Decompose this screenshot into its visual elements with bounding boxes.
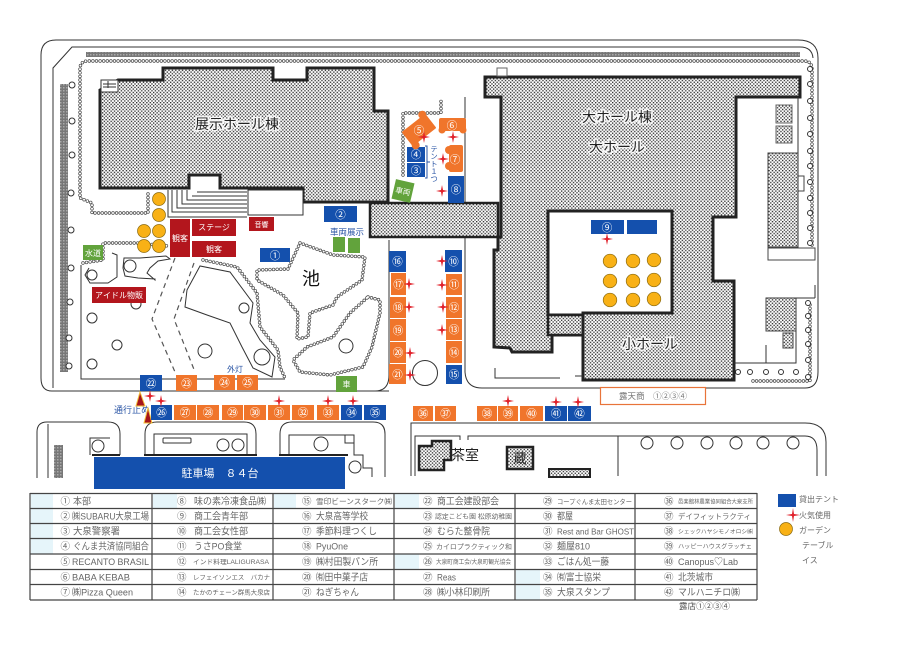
stage area: audience front: 観客 (206, 244, 222, 254)
tent 10: ⑩ (448, 256, 459, 268)
hatched strip: left (60, 84, 68, 372)
table column 5: ㉚ (543, 512, 553, 522)
stage area: audience left: 観客 (172, 233, 188, 243)
table column 4: ㉗ (423, 572, 433, 584)
table column 4 (423, 496, 512, 598)
tent 22 (140, 375, 162, 391)
table column 3: 季節料理つくし (316, 526, 377, 538)
legend: garden: ガーデン (799, 525, 831, 535)
table column 3 (302, 496, 393, 598)
hatched strip: top (86, 52, 800, 57)
table column 5: 都屋 (557, 512, 573, 522)
tea house block: 蔵 (513, 451, 527, 466)
table column 1: ② (60, 512, 70, 522)
garden tables by stage (138, 192, 166, 252)
table column 6: ㊳ (664, 526, 674, 538)
tea house block: 茶室 (451, 447, 479, 463)
legend: rental tent: 貸出テント (799, 494, 839, 504)
tent 40 (520, 406, 543, 421)
vehicle space bottom: 車 (342, 379, 350, 389)
table column 6: デイフィットラクティ (678, 511, 751, 521)
tent 3 (407, 163, 425, 177)
table column 5: ㉙ (543, 496, 553, 508)
table column 6: ㊵ (664, 557, 674, 568)
tent 12 (446, 297, 462, 318)
tent 13 (446, 319, 462, 340)
tent 23: ㉓ (181, 378, 192, 390)
table column 5: ㈲富士協栄 (557, 572, 601, 584)
table column 6: 北茨城市 (678, 572, 713, 584)
tent 34: ㉞ (346, 407, 357, 419)
water supply (83, 245, 103, 260)
annex buildings right (495, 68, 815, 378)
tent 23 (176, 375, 197, 391)
tent 39 (498, 406, 518, 421)
tent 2: ② (335, 209, 346, 221)
tent 40: ㊵ (526, 408, 537, 420)
tent 7 garden table (445, 145, 463, 172)
tent 18: ⑱ (393, 302, 404, 314)
table column 3: ⑲ (302, 557, 312, 568)
open-air stalls box (600, 388, 706, 404)
table column 2: ⑨ (177, 512, 187, 522)
table column 2: 味の素冷凍食品㈱ (194, 496, 266, 508)
island (293, 297, 380, 375)
table column 5: ごはん処一藤 (557, 556, 609, 568)
corridor (370, 203, 498, 237)
stalls note under table: 露店①②③④ (679, 601, 731, 611)
table column 1: ぐんま共済協同組合 (73, 540, 149, 552)
table column 5: Rest and Bar GHOST (557, 526, 634, 536)
tent 28: ㉘ (203, 407, 214, 419)
garden (81, 253, 285, 379)
table column 2 (177, 496, 270, 598)
lower block middle (144, 422, 257, 455)
table column 6: ㊲ (664, 512, 674, 522)
vehicle space forecourt: 車両 (395, 184, 412, 198)
table column 1: BABA KEBAB (72, 572, 130, 584)
exhibition hall building (100, 68, 388, 202)
exhibitor table (30, 493, 757, 600)
tent 42: ㊷ (574, 408, 585, 420)
tent 31: ㉛ (274, 407, 285, 419)
tent 12: ⑫ (449, 302, 460, 314)
tent 15 (446, 365, 462, 384)
tent 34 (341, 405, 362, 420)
table column 6: Canopus♡Lab (678, 557, 738, 568)
parking area (94, 457, 345, 489)
tent 29 (222, 405, 243, 420)
tent 4: ④ (411, 149, 422, 161)
table column 3: PyuOne (316, 542, 348, 552)
extra blue tent (627, 220, 657, 234)
tent 9 (591, 220, 624, 234)
tent 27: ㉗ (180, 407, 191, 419)
table column 6: ㊷ (664, 588, 674, 598)
tent 27 (174, 405, 196, 420)
table column 2: ⑪ (177, 542, 187, 552)
tent 33 (317, 405, 339, 420)
table column 1: ④ (60, 542, 70, 552)
table column 2: ⑧ (177, 496, 187, 508)
table column 5: 麺屋810 (557, 540, 590, 552)
table column 5: コープぐんま太田センター (557, 497, 632, 506)
tent 1: ① (270, 250, 281, 262)
vehicle space bottom (336, 376, 357, 392)
pond (257, 243, 365, 339)
tent 41: ㊶ (551, 408, 562, 420)
tent 22: ㉒ (146, 378, 157, 390)
tent 19 (390, 319, 406, 341)
stage (192, 219, 236, 236)
left path lamps (66, 82, 75, 369)
tent 28 (197, 405, 219, 420)
table column 2: ⑬ (177, 572, 187, 584)
table column 6 (664, 496, 753, 598)
road closed label: 通行止め (114, 404, 150, 415)
right path lamps (736, 66, 812, 380)
vehicle display label: 車両展示 (330, 227, 364, 237)
table column 5: 大泉スタンプ (557, 586, 610, 598)
tea house block (411, 423, 826, 477)
table column 4: 商工会建設部会 (437, 496, 499, 508)
table column 4: むらた整骨院 (437, 526, 490, 538)
table cell tints (31, 494, 540, 600)
table column 2: ⑫ (177, 557, 187, 568)
tent 29: ㉙ (227, 407, 238, 419)
table column 3: ⑱ (302, 542, 312, 552)
tent 37 (435, 406, 456, 421)
table column 3: ⑰ (302, 526, 312, 538)
sound booth (249, 217, 274, 231)
tent 38: ㊳ (482, 408, 493, 420)
garden tables in courtyard (603, 253, 661, 307)
table column 6: シェックハヤシモノオロシ㈱ (678, 528, 753, 536)
stage area: audience left (170, 219, 190, 257)
stage: ステージ (198, 223, 230, 232)
site outer boundary (41, 40, 818, 391)
table column 4: 認定こども園 松原幼稚園 (435, 512, 512, 520)
lower block right (279, 422, 385, 477)
tent 30 (244, 405, 266, 420)
tent 4 (407, 147, 425, 162)
tent 26: ㉖ (156, 407, 167, 419)
tent 30: ㉚ (250, 407, 261, 419)
table column 2: 商工会青年部 (194, 510, 248, 522)
table column 2: インド料理LALIGURASA (193, 557, 270, 566)
idol goods stall: アイドル物販 (95, 290, 143, 300)
table column 3: ⑯ (302, 512, 312, 522)
exhibition hall building: 展示ホール棟 (195, 116, 279, 132)
open-air stalls box: 露天商 ①②③④ (619, 391, 687, 401)
tent 37: ㊲ (440, 408, 451, 420)
table column 1: ㈱Pizza Queen (72, 586, 133, 598)
tent 10 (445, 250, 462, 272)
tent 20 (390, 342, 406, 363)
road closed cone lower (144, 408, 152, 423)
table column 1: ⑦ (60, 588, 70, 598)
bead walls (80, 61, 812, 381)
tent 3: ③ (411, 165, 422, 177)
tent 21: ㉑ (392, 369, 403, 381)
tent 14: ⑭ (449, 347, 460, 359)
table grid (30, 493, 757, 600)
table column 1: 大泉警察署 (73, 526, 120, 538)
legend: fire use: 火気使用 (799, 510, 831, 520)
table column 3: 雪印ビーンスターク㈱ (316, 496, 393, 506)
tent 16 (389, 251, 406, 272)
tent 26 (151, 405, 172, 420)
tent 25: ㉕ (242, 377, 253, 389)
tent 35: ㉟ (370, 407, 381, 419)
table column 5: ㉟ (543, 588, 553, 598)
tent 8: ⑧ (451, 184, 462, 196)
table column 1 (60, 496, 149, 598)
table column 6: 邑楽館林農業協同組合大泉支所 (678, 498, 753, 506)
vehicle space forecourt (391, 179, 415, 203)
tent 17 (391, 273, 406, 295)
table column 4: ㉘ (423, 588, 433, 598)
tent 33: ㉝ (323, 407, 334, 419)
table column 4: ㉒ (423, 496, 433, 508)
fire use markers (144, 131, 613, 408)
table column 1: ⑥ (60, 572, 70, 584)
tent 5 garden table (398, 109, 440, 151)
site inner boundary (53, 47, 813, 388)
tent 24 (214, 375, 235, 390)
tent 11 (446, 274, 462, 295)
tent 36 (413, 406, 433, 421)
stage area: audience front (192, 241, 236, 257)
tent 38 (477, 406, 497, 421)
table column 4: ㉓ (423, 512, 433, 522)
tent 19: ⑲ (393, 325, 404, 337)
table column 2: レフェイソンエス バカナ (193, 574, 270, 582)
table column 3: ねぎちゃん (316, 586, 359, 598)
tent 18 (390, 297, 406, 318)
table column 2: うさPO食堂 (194, 540, 242, 552)
tent 2 (324, 206, 357, 222)
tent 20: ⑳ (393, 347, 404, 359)
tent 13: ⑬ (449, 324, 460, 336)
table column 1: 本部 (73, 496, 91, 508)
tent 32: ㉜ (298, 407, 309, 419)
tent 41 (545, 406, 567, 421)
table column 5: ㉜ (543, 542, 553, 552)
tent 5 garden table: ⑤ (414, 125, 425, 137)
table column 4: カイロプラクティック和 (436, 542, 512, 551)
table column 1: ⑤ (60, 557, 70, 568)
table column 4: ㈱小林印刷所 (437, 586, 490, 598)
tent bracket note: テント１つ (430, 145, 438, 182)
table column 1: ③ (60, 526, 70, 538)
legend: chair: イス (802, 556, 818, 565)
table column 3: ㉑ (302, 588, 312, 598)
table column 4: 大泉町商工会/大泉町観光協会 (436, 558, 511, 566)
table column 6: ㊴ (664, 542, 674, 552)
table column 5: ㉞ (543, 572, 553, 584)
street lamp label: 外灯 (227, 364, 243, 374)
large hall building: 大ホール棟 (582, 109, 652, 125)
tent 36: ㊱ (418, 408, 429, 420)
table column 4: ㉕ (423, 542, 433, 552)
round bed (412, 360, 438, 386)
tent 6 garden table: ⑥ (447, 120, 458, 132)
entrance steps (168, 190, 303, 217)
tent 9: ⑨ (602, 222, 613, 234)
legend: table: テーブル (802, 540, 834, 550)
table column 3: ㈱村田製パン所 (316, 556, 378, 568)
table column 3: 大泉高等学校 (316, 510, 368, 522)
table column 4: ㉖ (423, 557, 433, 568)
tent 35 (364, 405, 386, 420)
site plan base (41, 40, 818, 391)
legend (778, 494, 839, 565)
tent 7 garden table: ⑦ (450, 154, 461, 166)
tent 16: ⑯ (392, 256, 403, 268)
table column 3: ㈲田中菓子店 (316, 572, 368, 584)
vehicle display spaces (333, 237, 360, 253)
table column 2: ⑭ (177, 588, 187, 598)
table column 3: ⑳ (302, 572, 312, 584)
tent 42 (568, 406, 591, 421)
tent 32 (292, 405, 314, 420)
tent 6 garden table (438, 118, 466, 134)
tent bracket note (425, 145, 438, 182)
table column 1: RECANTO BRASIL (72, 557, 149, 568)
table column 5 (543, 496, 634, 598)
tent 39: ㊴ (503, 408, 514, 420)
table column 3: ⑮ (302, 496, 312, 508)
table column 6: ㊱ (664, 496, 674, 508)
table column 1: ① (60, 496, 70, 508)
table column 2: ⑩ (177, 526, 187, 538)
table column 2: 商工会女性部 (194, 526, 248, 538)
tent 21 (389, 364, 406, 384)
large hall building: 大ホール (589, 139, 645, 155)
water supply: 水道 (85, 248, 101, 258)
table column 5: ㉛ (543, 526, 553, 538)
table column 4: ㉔ (423, 526, 433, 538)
tent 24: ㉔ (219, 377, 230, 389)
table column 1: ㈱SUBARU大泉工場 (72, 510, 149, 522)
tent 1 (260, 248, 290, 262)
tent 15: ⑮ (449, 369, 460, 381)
tent 11: ⑪ (449, 279, 460, 291)
large hall building (485, 77, 800, 380)
idol goods stall (92, 287, 146, 303)
large hall building: 小ホール (622, 336, 678, 352)
table column 2: たかのチェーン群馬大泉店 (193, 588, 270, 596)
table column 6: ハッピーハウスグラッチェ (678, 542, 752, 550)
table column 5: ㉝ (543, 557, 553, 568)
road closed cone upper (136, 392, 145, 406)
parking area: 駐車場 ８４台 (182, 466, 258, 480)
tent 8 (448, 176, 464, 203)
tent 25 (237, 375, 258, 390)
table column 6: ㊶ (664, 572, 674, 584)
lower block left (37, 422, 120, 478)
table column 4: Reas (437, 572, 456, 584)
pond: 池 (302, 269, 320, 289)
tent 14 (446, 341, 462, 363)
tent 17: ⑰ (393, 279, 404, 291)
tent 31 (268, 405, 290, 420)
sound booth: 音響 (254, 220, 268, 229)
table column 6: マルハニチロ㈱ (678, 586, 740, 598)
